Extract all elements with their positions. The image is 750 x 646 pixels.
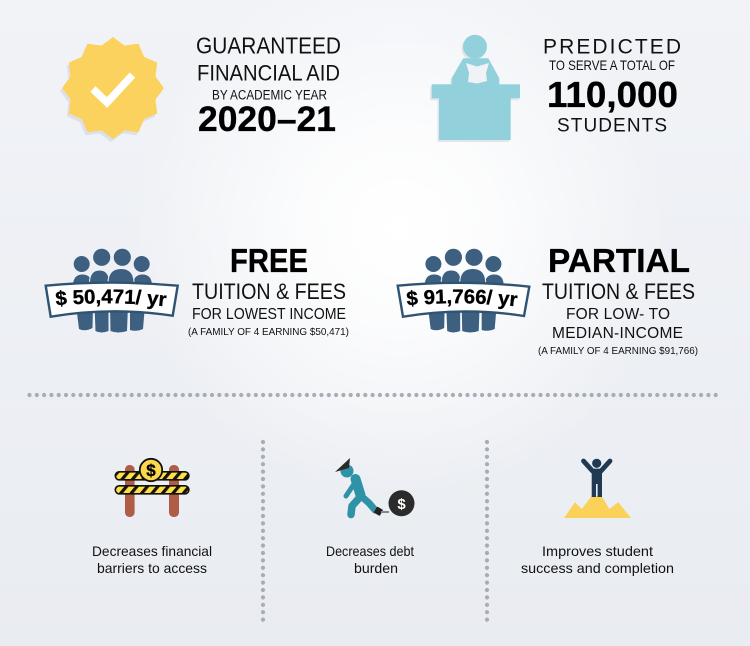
text: improves student success xyxy=(521,543,674,576)
text block: partial tuition: TUITION & FEES xyxy=(542,279,695,304)
icon: graduate dragging ball and chain: $ xyxy=(397,496,406,513)
icon: barrier with dollar coin: $ xyxy=(146,461,156,480)
icon: family with $50,471 banner xyxy=(44,248,180,332)
icon: reader at podium xyxy=(430,35,520,142)
label: $ 50,471/ yr: $ 50,471/ yr xyxy=(56,289,167,310)
icon: yellow badge with check xyxy=(60,37,164,142)
text block: guaranteed financial aid: BY ACADEMIC YEAR xyxy=(212,88,327,102)
text block: predicted students xyxy=(543,36,681,136)
text block: free tuition: FREE xyxy=(230,242,308,279)
text: decreases debt burden: burden xyxy=(354,560,398,576)
icon: family with $91,766 banner xyxy=(396,248,531,332)
text block: predicted students: STUDENTS xyxy=(557,116,667,136)
text block: guaranteed financial aid xyxy=(196,32,341,139)
text block: guaranteed financial aid: 2020–21 xyxy=(198,100,336,139)
text: decreases financial barriers xyxy=(92,543,212,576)
text block: partial tuition: (A FAMILY OF 4 EARNING $91,766) xyxy=(538,345,698,357)
text: improves student success: success and completion xyxy=(521,560,674,576)
label: $ 91,766/ yr: $ 91,766/ yr xyxy=(406,289,518,310)
icon: person on mountain xyxy=(564,459,631,518)
text block: free tuition: FOR LOWEST INCOME xyxy=(192,306,346,323)
text block: predicted students: TO SERVE A TOTAL OF xyxy=(549,57,675,73)
icon: graduate dragging ball and chain xyxy=(335,458,414,516)
text block: partial tuition: FOR LOW- TO xyxy=(566,306,670,323)
text: improves student success: Improves student xyxy=(542,543,653,559)
text block: guaranteed financial aid: GUARANTEED xyxy=(196,32,341,58)
icon: barrier with dollar coin xyxy=(115,459,189,517)
text: decreases debt burden: Decreases debt xyxy=(326,543,414,559)
text block: free tuition: (A FAMILY OF 4 EARNING $50,471) xyxy=(188,326,349,338)
text: decreases financial barriers: Decreases financial xyxy=(92,543,212,559)
text: decreases financial barriers: barriers to access xyxy=(97,560,207,576)
text block: predicted students: 110,000 xyxy=(547,74,678,115)
text block: free tuition xyxy=(188,242,349,338)
text block: partial tuition xyxy=(538,242,698,357)
text block: free tuition: TUITION & FEES xyxy=(192,279,346,304)
text block: guaranteed financial aid: FINANCIAL AID xyxy=(197,60,340,86)
text: decreases debt burden xyxy=(326,543,414,576)
text block: partial tuition: MEDIAN-INCOME xyxy=(552,325,683,342)
text block: predicted students: PREDICTED xyxy=(543,36,681,58)
text block: partial tuition: PARTIAL xyxy=(548,242,690,279)
